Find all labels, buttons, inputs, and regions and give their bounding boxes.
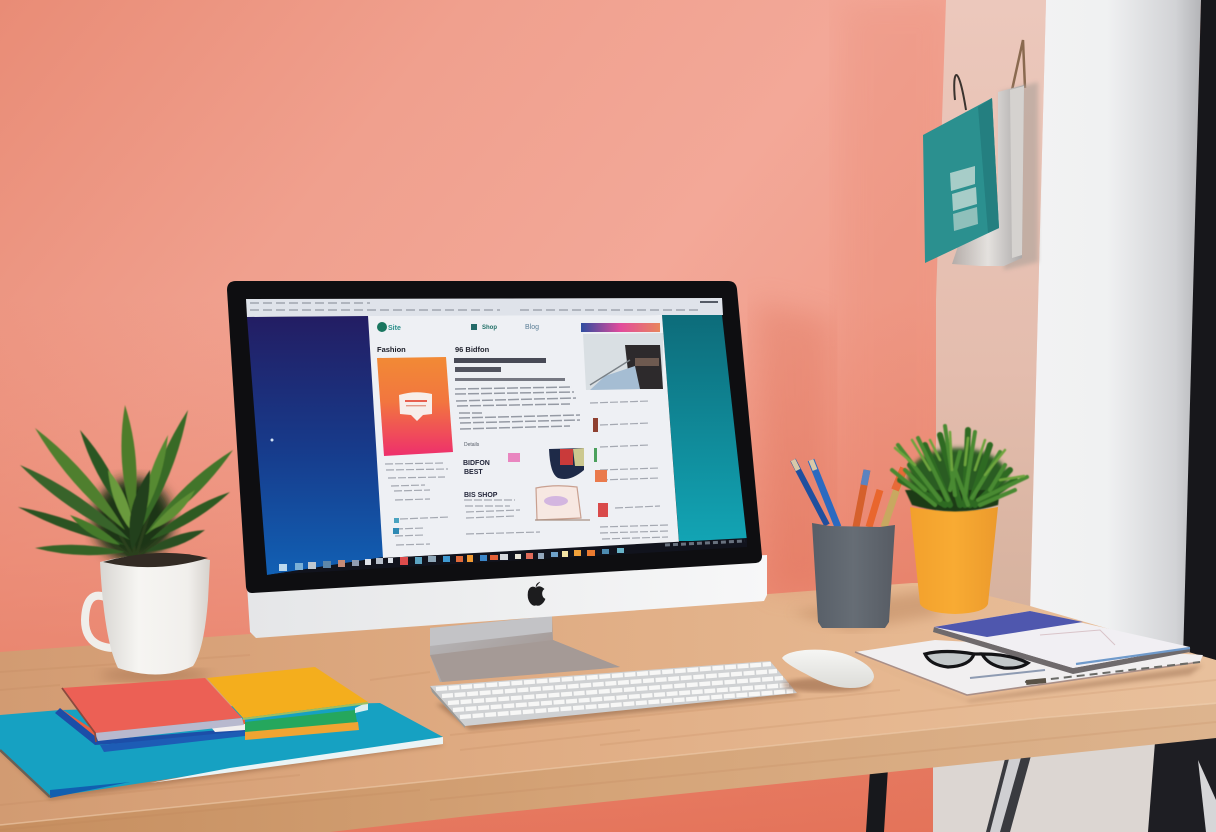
taskbar <box>267 538 747 575</box>
article text lines <box>455 387 580 429</box>
page photo <box>583 333 663 390</box>
web page <box>368 315 679 558</box>
papers behind the folder <box>952 82 1038 270</box>
blue and white book <box>933 611 1190 674</box>
left plant <box>18 405 233 562</box>
page header: Shop <box>482 325 497 331</box>
white open notebook <box>855 640 1203 695</box>
glasses <box>925 652 1028 668</box>
teal desktop panel <box>662 315 747 541</box>
mug handle <box>85 596 112 648</box>
foliage <box>892 426 1027 512</box>
page left heading: Fashion <box>377 345 406 354</box>
red notebook <box>62 678 242 733</box>
pot <box>910 507 998 614</box>
sidebar icons <box>393 418 608 534</box>
side wall <box>936 0 1046 612</box>
yellow notebook <box>207 667 368 718</box>
teal folder <box>923 98 999 263</box>
page subheading and product blocks <box>463 442 590 520</box>
monitor stand <box>430 616 620 682</box>
page header: Blog <box>525 324 539 331</box>
page subheading and product blocks: Details <box>464 442 480 448</box>
apple logo <box>528 582 545 605</box>
page subheading and product blocks: BEST <box>464 469 483 476</box>
page header: Site <box>388 325 401 332</box>
hanging folder and papers <box>923 40 1038 270</box>
keyboard <box>430 661 800 730</box>
white mug <box>85 553 210 681</box>
notebooks and glasses <box>855 611 1203 702</box>
stems <box>95 500 170 560</box>
page subheading and product blocks: BIS SHOP <box>464 492 498 499</box>
blue desktop panel <box>247 316 384 575</box>
orange card <box>377 357 453 456</box>
orange pot plant <box>892 426 1027 614</box>
black bezel <box>227 281 762 593</box>
dark window frame <box>1183 0 1216 672</box>
monitor shadow on wall <box>755 300 830 590</box>
page header <box>377 322 539 332</box>
monitor <box>227 281 767 638</box>
wooden desk <box>0 583 1216 832</box>
page subheading and product blocks: BIDFON <box>463 460 490 467</box>
toolbar <box>246 298 723 317</box>
silver chin <box>247 555 767 638</box>
teal folder <box>0 703 443 798</box>
article headline <box>454 358 565 381</box>
page banner <box>581 323 660 332</box>
pen cup with pens <box>793 460 904 628</box>
lower layers <box>55 702 368 752</box>
table legs under desk <box>866 700 1216 832</box>
mouse <box>782 650 874 692</box>
white pillar <box>1030 0 1201 660</box>
leaves <box>18 405 233 555</box>
page center heading: 96 Bidfon <box>455 345 490 354</box>
stacked colorful notebooks <box>0 667 445 800</box>
